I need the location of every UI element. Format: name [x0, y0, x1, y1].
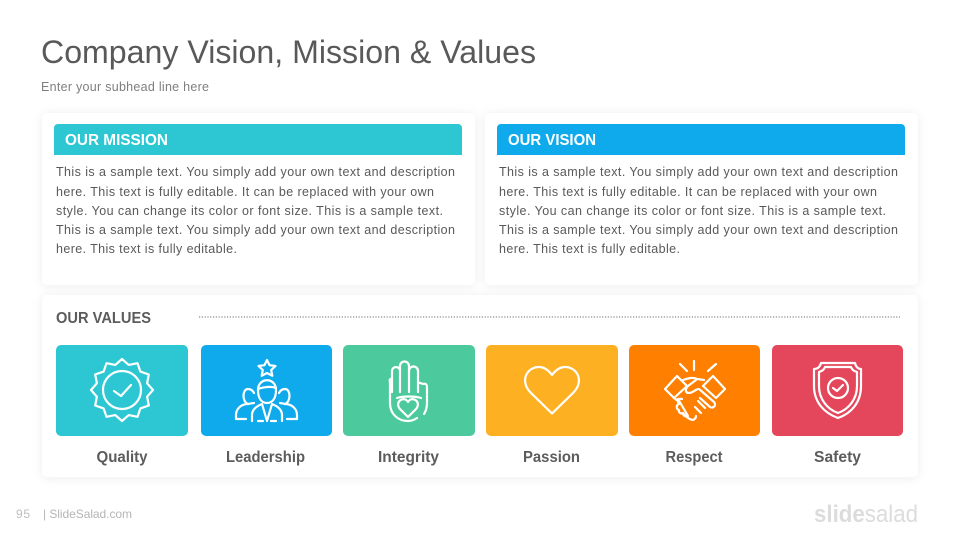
panel: vision: [485, 113, 918, 285]
icon: leadership team: [236, 360, 297, 421]
value card: safety: [772, 345, 903, 466]
vision body text: here. This text is fully editable.: [499, 242, 680, 256]
value card: leadership: [201, 345, 332, 466]
vision body text: [499, 165, 898, 256]
vision body text: This is a sample text. You simply add your own text and description: [499, 165, 898, 179]
label: quality: Quality: [96, 449, 148, 466]
label: leadership: Leadership: [226, 449, 305, 466]
values heading: OUR VALUES: [56, 310, 151, 327]
mission body text: This is a sample text. You simply add your own text and description: [56, 223, 455, 237]
vision body text: This is a sample text. You simply add your own text and description: [499, 223, 898, 237]
panel: values: [42, 295, 918, 477]
mission body text: here. This text is fully editable. It can be replaced with your own: [56, 185, 434, 199]
mission header bar: OUR MISSION: [65, 132, 168, 149]
vision body text: here. This text is fully editable. It can be replaced with your own: [499, 185, 877, 199]
icon: handshake: [665, 361, 725, 420]
value card: passion: [486, 345, 618, 466]
mission body text: [56, 165, 455, 256]
label: passion: Passion: [523, 449, 580, 466]
icon: heart: [525, 367, 579, 414]
subhead: Enter your subhead line here: [41, 80, 209, 94]
value card: respect: [629, 345, 760, 466]
label: integrity: Integrity: [378, 449, 439, 466]
icon: shield: [814, 363, 861, 418]
icon: integrity hand: [390, 362, 427, 421]
mission header bar: [54, 124, 462, 155]
value card: quality: [56, 345, 188, 466]
vision header bar: [497, 124, 905, 155]
panel: mission: [42, 113, 475, 285]
mission body text: here. This text is fully editable.: [56, 242, 237, 256]
mission body text: style. You can change its color or font size. This is a sample text.: [56, 204, 443, 218]
footer source: | SlideSalad.com: [43, 507, 132, 521]
logo wordmark: slidesalad: [814, 501, 918, 528]
label: respect: Respect: [666, 449, 723, 466]
label: safety: Safety: [814, 449, 861, 466]
page number: 95: [16, 507, 30, 521]
value card: integrity: [343, 345, 475, 466]
icon: quality badge: [91, 359, 153, 421]
mission body text: This is a sample text. You simply add your own text and description: [56, 165, 455, 179]
vision body text: style. You can change its color or font size. This is a sample text.: [499, 204, 886, 218]
vision header bar: OUR VISION: [508, 132, 596, 149]
title: Company Vision, Mission & Values: [41, 34, 536, 70]
